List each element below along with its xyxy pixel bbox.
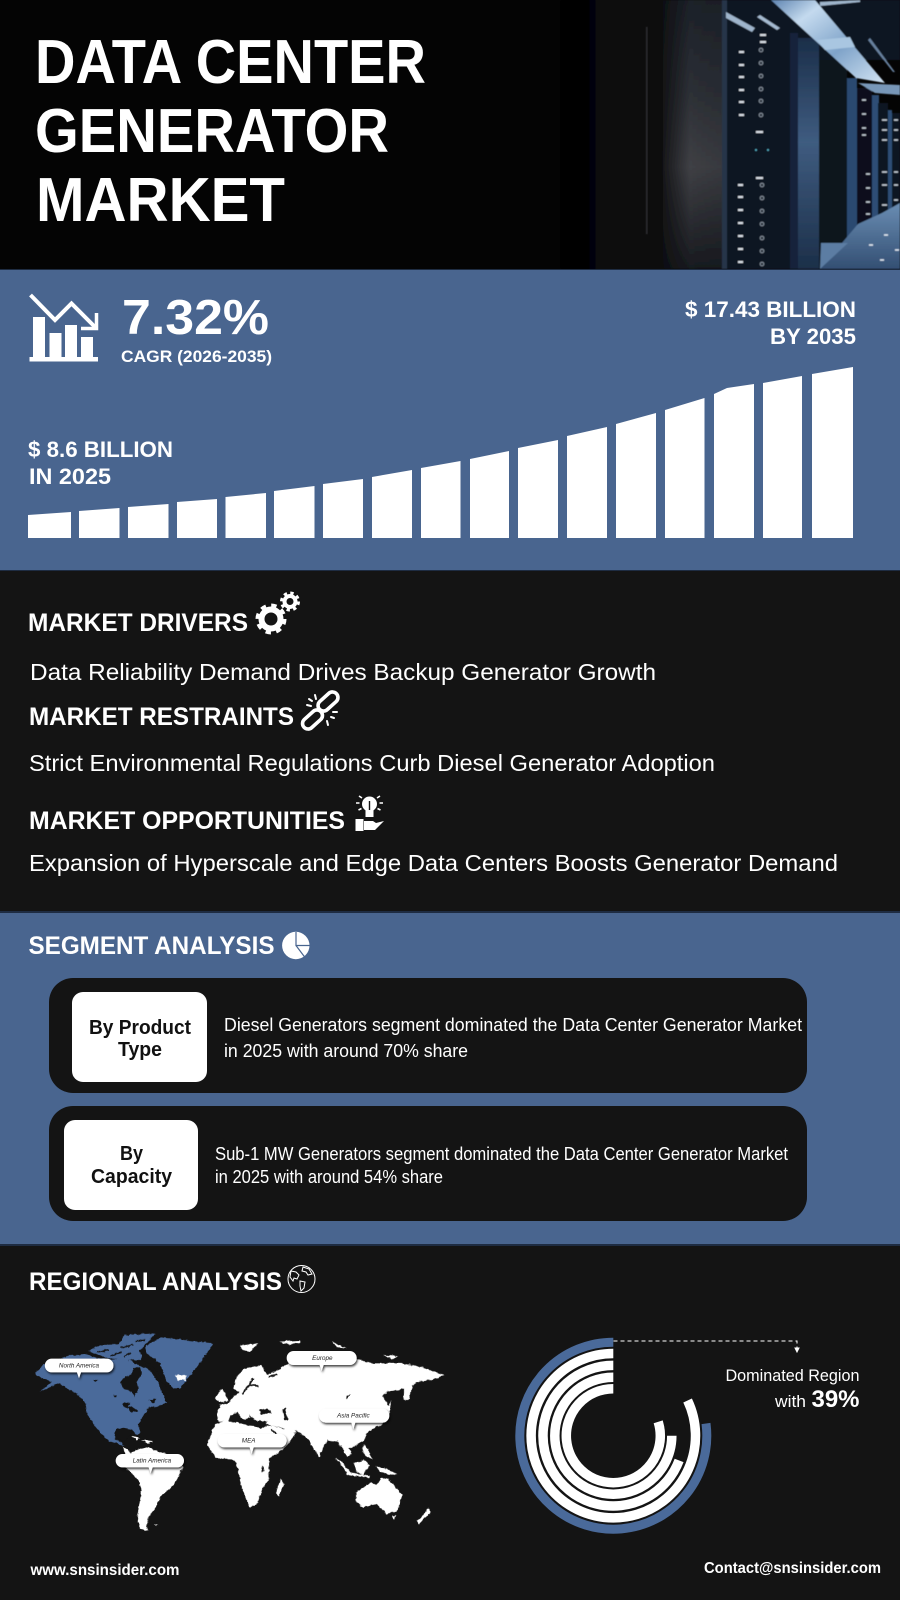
icon: pie chart bbox=[282, 932, 310, 959]
heading: segment analysis: SEGMENT ANALYSIS bbox=[28, 932, 274, 960]
2035 value: BY 2035 bbox=[770, 324, 856, 349]
text: dominated region bbox=[726, 1366, 860, 1413]
callout: Europe bbox=[287, 1351, 357, 1371]
radial chart: dominated region bbox=[520, 1342, 707, 1529]
callout: Europe: Europe bbox=[312, 1355, 333, 1362]
text: contact: Contact@snsinsider.com bbox=[704, 1560, 881, 1577]
title bbox=[35, 28, 426, 235]
card: by product type: By Product bbox=[89, 1017, 191, 1039]
2025 value: IN 2025 bbox=[29, 464, 111, 489]
map: land masses bbox=[35, 1333, 444, 1531]
callout: Asia Pacific bbox=[319, 1409, 389, 1429]
map: North America highlighted bbox=[35, 1333, 213, 1446]
card: by capacity: By bbox=[120, 1143, 144, 1165]
card: by capacity bbox=[49, 1106, 807, 1221]
arrow: dashed leader line bbox=[614, 1341, 799, 1352]
text: dominated region: with bbox=[774, 1392, 806, 1411]
heading: market opportunities: MARKET OPPORTUNITIES bbox=[29, 807, 345, 835]
title: GENERATOR bbox=[35, 97, 389, 166]
text: dominated region: 39% bbox=[812, 1386, 860, 1413]
panel: regional analysis bbox=[29, 1266, 881, 1579]
card: by capacity: Sub-1 MW Generators segment dominated the Data Center Generator Market bbox=[215, 1144, 788, 1164]
callout: Latin America bbox=[116, 1454, 184, 1473]
icon: lightbulb in hand bbox=[356, 796, 384, 831]
text: website: www.snsinsider.com bbox=[30, 1562, 179, 1579]
callout: MEA bbox=[218, 1434, 287, 1454]
callout: North America: North America bbox=[59, 1363, 100, 1370]
panel: segment analysis bbox=[0, 911, 900, 1246]
icon: broken link bbox=[300, 690, 340, 731]
world map bbox=[35, 1333, 444, 1531]
text: restraint: Strict Environmental Regulations Curb Diesel Generator Adoption bbox=[29, 750, 715, 776]
icon: globe bbox=[288, 1266, 315, 1292]
callout: MEA: MEA bbox=[242, 1438, 256, 1445]
icon: gears bbox=[258, 593, 298, 632]
hero photo: server room bbox=[560, 0, 900, 269]
card: by product type bbox=[49, 978, 807, 1093]
map: North America bays and lakes bbox=[93, 1340, 167, 1442]
icon: chart with declining arrow bbox=[30, 295, 98, 362]
heading: regional analysis: REGIONAL ANALYSIS bbox=[29, 1268, 282, 1296]
callout: North America bbox=[45, 1359, 113, 1378]
callout: Asia Pacific: Asia Pacific bbox=[336, 1412, 371, 1419]
panel: hero header bbox=[0, 0, 900, 270]
card: by product type: Type bbox=[118, 1039, 162, 1061]
map: Europe, Asia, Africa, Oceania bbox=[174, 1340, 444, 1524]
heading: market drivers: MARKET DRIVERS bbox=[28, 609, 248, 637]
2025 value: $ 8.6 BILLION bbox=[28, 437, 173, 462]
card: by product type: in 2025 with around 70% share bbox=[224, 1041, 468, 1061]
text: opportunity: Expansion of Hyperscale and Edge Data Centers Boosts Generator Demand bbox=[29, 850, 838, 876]
2035 value bbox=[685, 297, 856, 349]
bar chart: growth bbox=[28, 367, 853, 538]
title: DATA CENTER bbox=[35, 28, 426, 97]
panel: market size bbox=[0, 269, 900, 570]
heading: market restraints: MARKET RESTRAINTS bbox=[29, 703, 294, 731]
text: dominated region: Dominated Region bbox=[726, 1366, 860, 1385]
card: by capacity: in 2025 with around 54% share bbox=[215, 1167, 443, 1187]
card: by product type: Diesel Generators segment dominated the Data Center Generator Market bbox=[224, 1015, 802, 1035]
map: Latin America bbox=[123, 1436, 183, 1531]
map: inland seas bbox=[228, 1374, 351, 1472]
text: driver: Data Reliability Demand Drives Backup Generator Growth bbox=[30, 659, 656, 685]
panel: market dynamics bbox=[0, 570, 900, 912]
CAGR label: CAGR (2026-2035) bbox=[121, 347, 272, 366]
callout: Latin America: Latin America bbox=[133, 1457, 172, 1464]
2025 value bbox=[28, 437, 173, 489]
CAGR value: 7.32% bbox=[122, 291, 269, 345]
card: by capacity: Capacity bbox=[91, 1166, 173, 1188]
title: MARKET bbox=[36, 166, 285, 235]
2035 value: $ 17.43 BILLION bbox=[685, 297, 856, 322]
